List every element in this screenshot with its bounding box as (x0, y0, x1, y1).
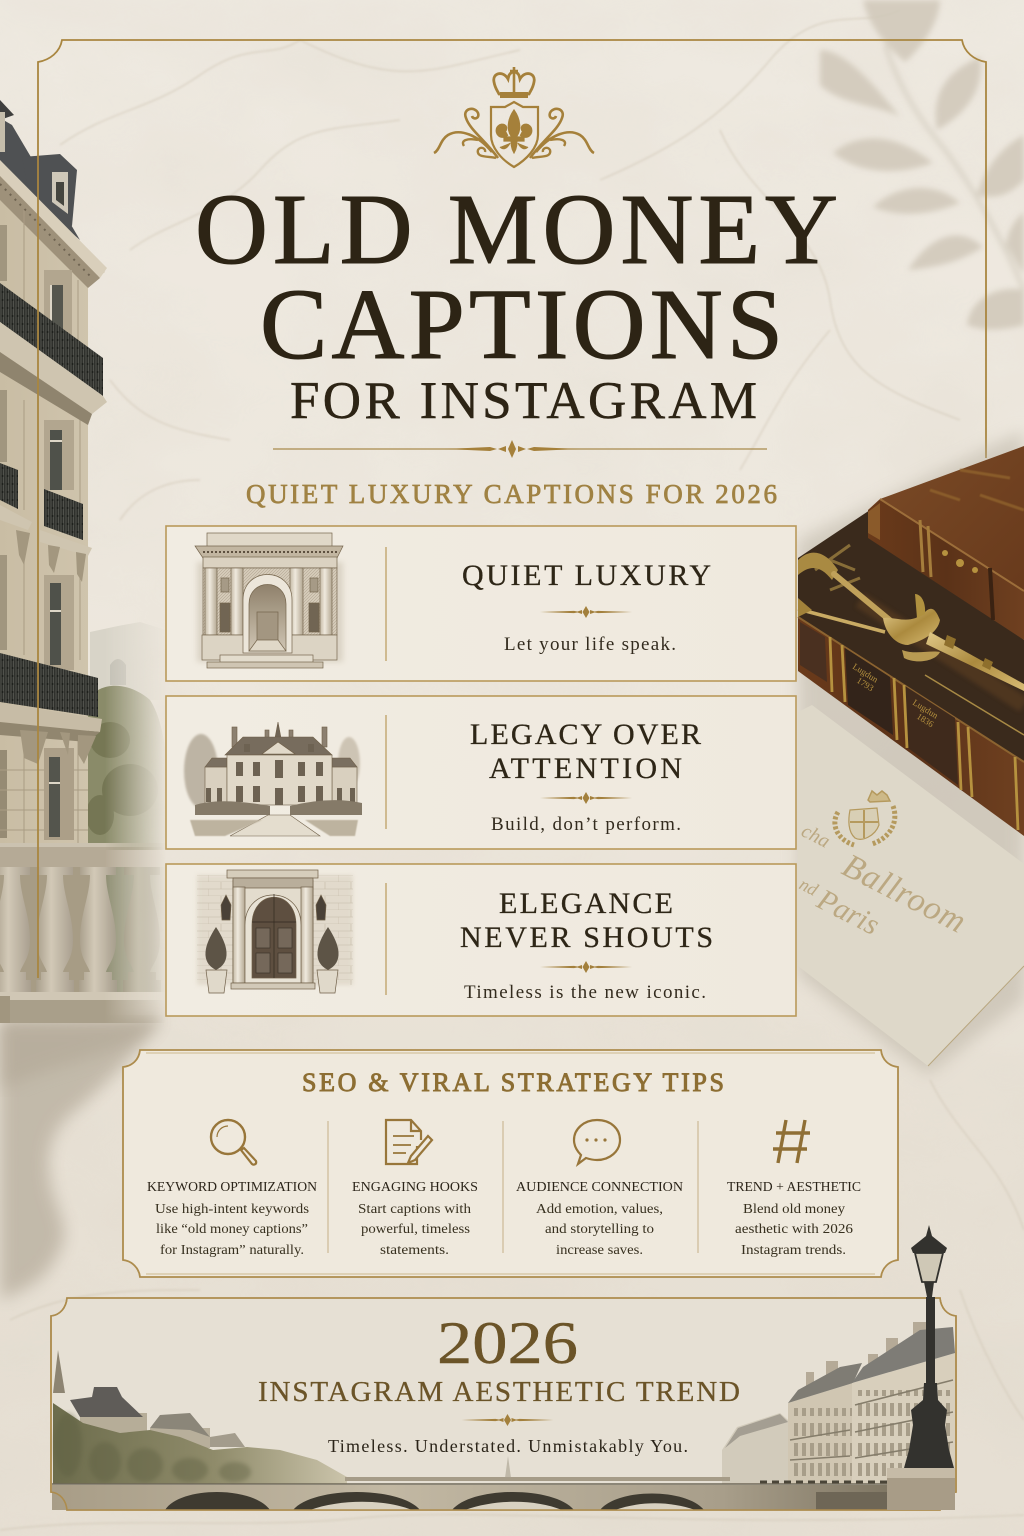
heading: LEGACY OVER (470, 718, 701, 751)
subtitle: for Instagram: FOR INSTAGRAM (290, 372, 757, 430)
icon: speech bubble (574, 1120, 620, 1164)
tip: keyword optimization: Use high-intent keywords (155, 1201, 309, 1216)
books, letter opener and letter (796, 430, 1024, 1075)
tip: audience connection: Add emotion, values, (536, 1201, 663, 1216)
engraving: classical portico (195, 533, 343, 668)
street lamp (887, 1225, 955, 1510)
year: 2026 (437, 1310, 578, 1376)
lower book: Lugdun (851, 661, 880, 685)
ornament (540, 606, 632, 618)
banner heading: INSTAGRAM AESTHETIC TREND (258, 1376, 740, 1408)
balcony 3 (0, 653, 102, 764)
script lettering (796, 820, 972, 942)
tip: keyword optimization: like “old money captions” (156, 1221, 308, 1236)
panel: Quiet Luxury card (166, 526, 796, 681)
tip: keyword optimization: for Instagram” naturally. (160, 1242, 304, 1257)
windows (0, 225, 74, 840)
balcony 2 (0, 463, 92, 582)
tip: audience connection: increase saves. (556, 1242, 643, 1257)
heading: NEVER SHOUTS (460, 921, 713, 954)
title divider ornament (273, 440, 767, 458)
title: OLD MONEY (195, 173, 838, 285)
lower book: 1836 (915, 711, 936, 729)
upper book (868, 446, 1024, 640)
script lettering: Paris (811, 882, 885, 942)
stone balustrade (0, 843, 168, 1023)
heading: ATTENTION (489, 752, 682, 785)
lower book (798, 510, 1024, 836)
caption: Let your life speak. (504, 634, 676, 655)
caption: Build, don’t perform. (491, 814, 681, 835)
tip: audience connection (516, 1120, 683, 1257)
tip: keyword optimization (147, 1120, 317, 1257)
panel: Legacy Over Attention card (166, 696, 796, 849)
script lettering: Ballroom (836, 847, 972, 941)
heading: ELEGANCE (499, 887, 673, 920)
tip: keyword optimization: KEYWORD OPTIMIZATION (147, 1179, 317, 1194)
title (195, 173, 838, 430)
foliage shadow: top right (820, 0, 1024, 330)
spine panels (800, 622, 958, 785)
scenery: right buildings (722, 1322, 955, 1484)
rustication lines (0, 210, 88, 845)
crest emblem (434, 67, 594, 167)
divider (385, 715, 387, 829)
panel: Elegance Never Shouts card (166, 864, 796, 1016)
crest on letter (835, 791, 895, 845)
title: CAPTIONS (260, 268, 783, 380)
tip: engaging hooks (352, 1120, 478, 1257)
crown (494, 67, 534, 98)
scenery: stone bridge (52, 1456, 888, 1510)
tip: trend + aesthetic: Instagram trends. (741, 1242, 846, 1257)
divider (385, 883, 387, 995)
fleur-de-lis (496, 110, 532, 153)
column dividers (328, 1121, 698, 1253)
cornice (0, 160, 107, 278)
icon: document and pencil (386, 1120, 432, 1164)
tagline: Timeless. Understated. Unmistakably You. (328, 1436, 688, 1456)
tip: engaging hooks: Start captions with (358, 1201, 471, 1216)
tip: trend + aesthetic: TREND + AESTHETIC (727, 1179, 861, 1194)
brass letter opener (798, 553, 1024, 691)
tip: engaging hooks: powerful, timeless (361, 1221, 470, 1236)
lower book: 1793 (855, 675, 876, 693)
divider (385, 547, 387, 661)
outer gold frame (38, 40, 986, 978)
tip: trend + aesthetic: Blend old money (743, 1201, 845, 1216)
ornament (540, 792, 632, 804)
heading (460, 887, 713, 954)
script lettering: cha (798, 820, 833, 853)
panel: SEO and viral strategy tips (123, 1050, 898, 1277)
stone floor shadow: lower left (0, 1017, 163, 1300)
script lettering: nd (796, 874, 822, 900)
ornament (540, 961, 632, 973)
engraving: arched door with topiaries (197, 870, 353, 993)
ornament (462, 1414, 554, 1426)
marble shadow (798, 430, 1024, 1075)
caption: Timeless is the new iconic. (464, 982, 706, 1003)
lower book: Lugdun (911, 697, 940, 721)
tip: trend + aesthetic: aesthetic with 2026 (735, 1221, 853, 1236)
tip: trend + aesthetic (727, 1120, 861, 1257)
heading: SEO & VIRAL STRATEGY TIPS (302, 1068, 724, 1097)
balcony 1 (0, 283, 107, 425)
panel: 2026 trend banner (51, 1298, 956, 1510)
icon: magnifying glass (211, 1120, 256, 1165)
facade body (0, 172, 105, 845)
scrolls (434, 109, 498, 158)
tip: audience connection: AUDIENCE CONNECTION (516, 1179, 683, 1194)
roof and dormers (0, 100, 80, 240)
engraving: manor house (184, 722, 362, 836)
letter card (796, 705, 1024, 1066)
tip: audience connection: and storytelling to (545, 1221, 654, 1236)
distant building and tree (86, 622, 168, 992)
scenery: left trees and buildings (53, 1350, 347, 1484)
tip: engaging hooks: statements. (380, 1242, 449, 1257)
section heading: QUIET LUXURY CAPTIONS FOR 2026 (246, 479, 777, 509)
heading (470, 718, 701, 785)
tip: engaging hooks: ENGAGING HOOKS (352, 1179, 478, 1194)
shield (491, 102, 538, 167)
heading: QUIET LUXURY (462, 559, 711, 592)
icon: hashtag (773, 1120, 810, 1163)
building: left Parisian facade (0, 100, 168, 1023)
